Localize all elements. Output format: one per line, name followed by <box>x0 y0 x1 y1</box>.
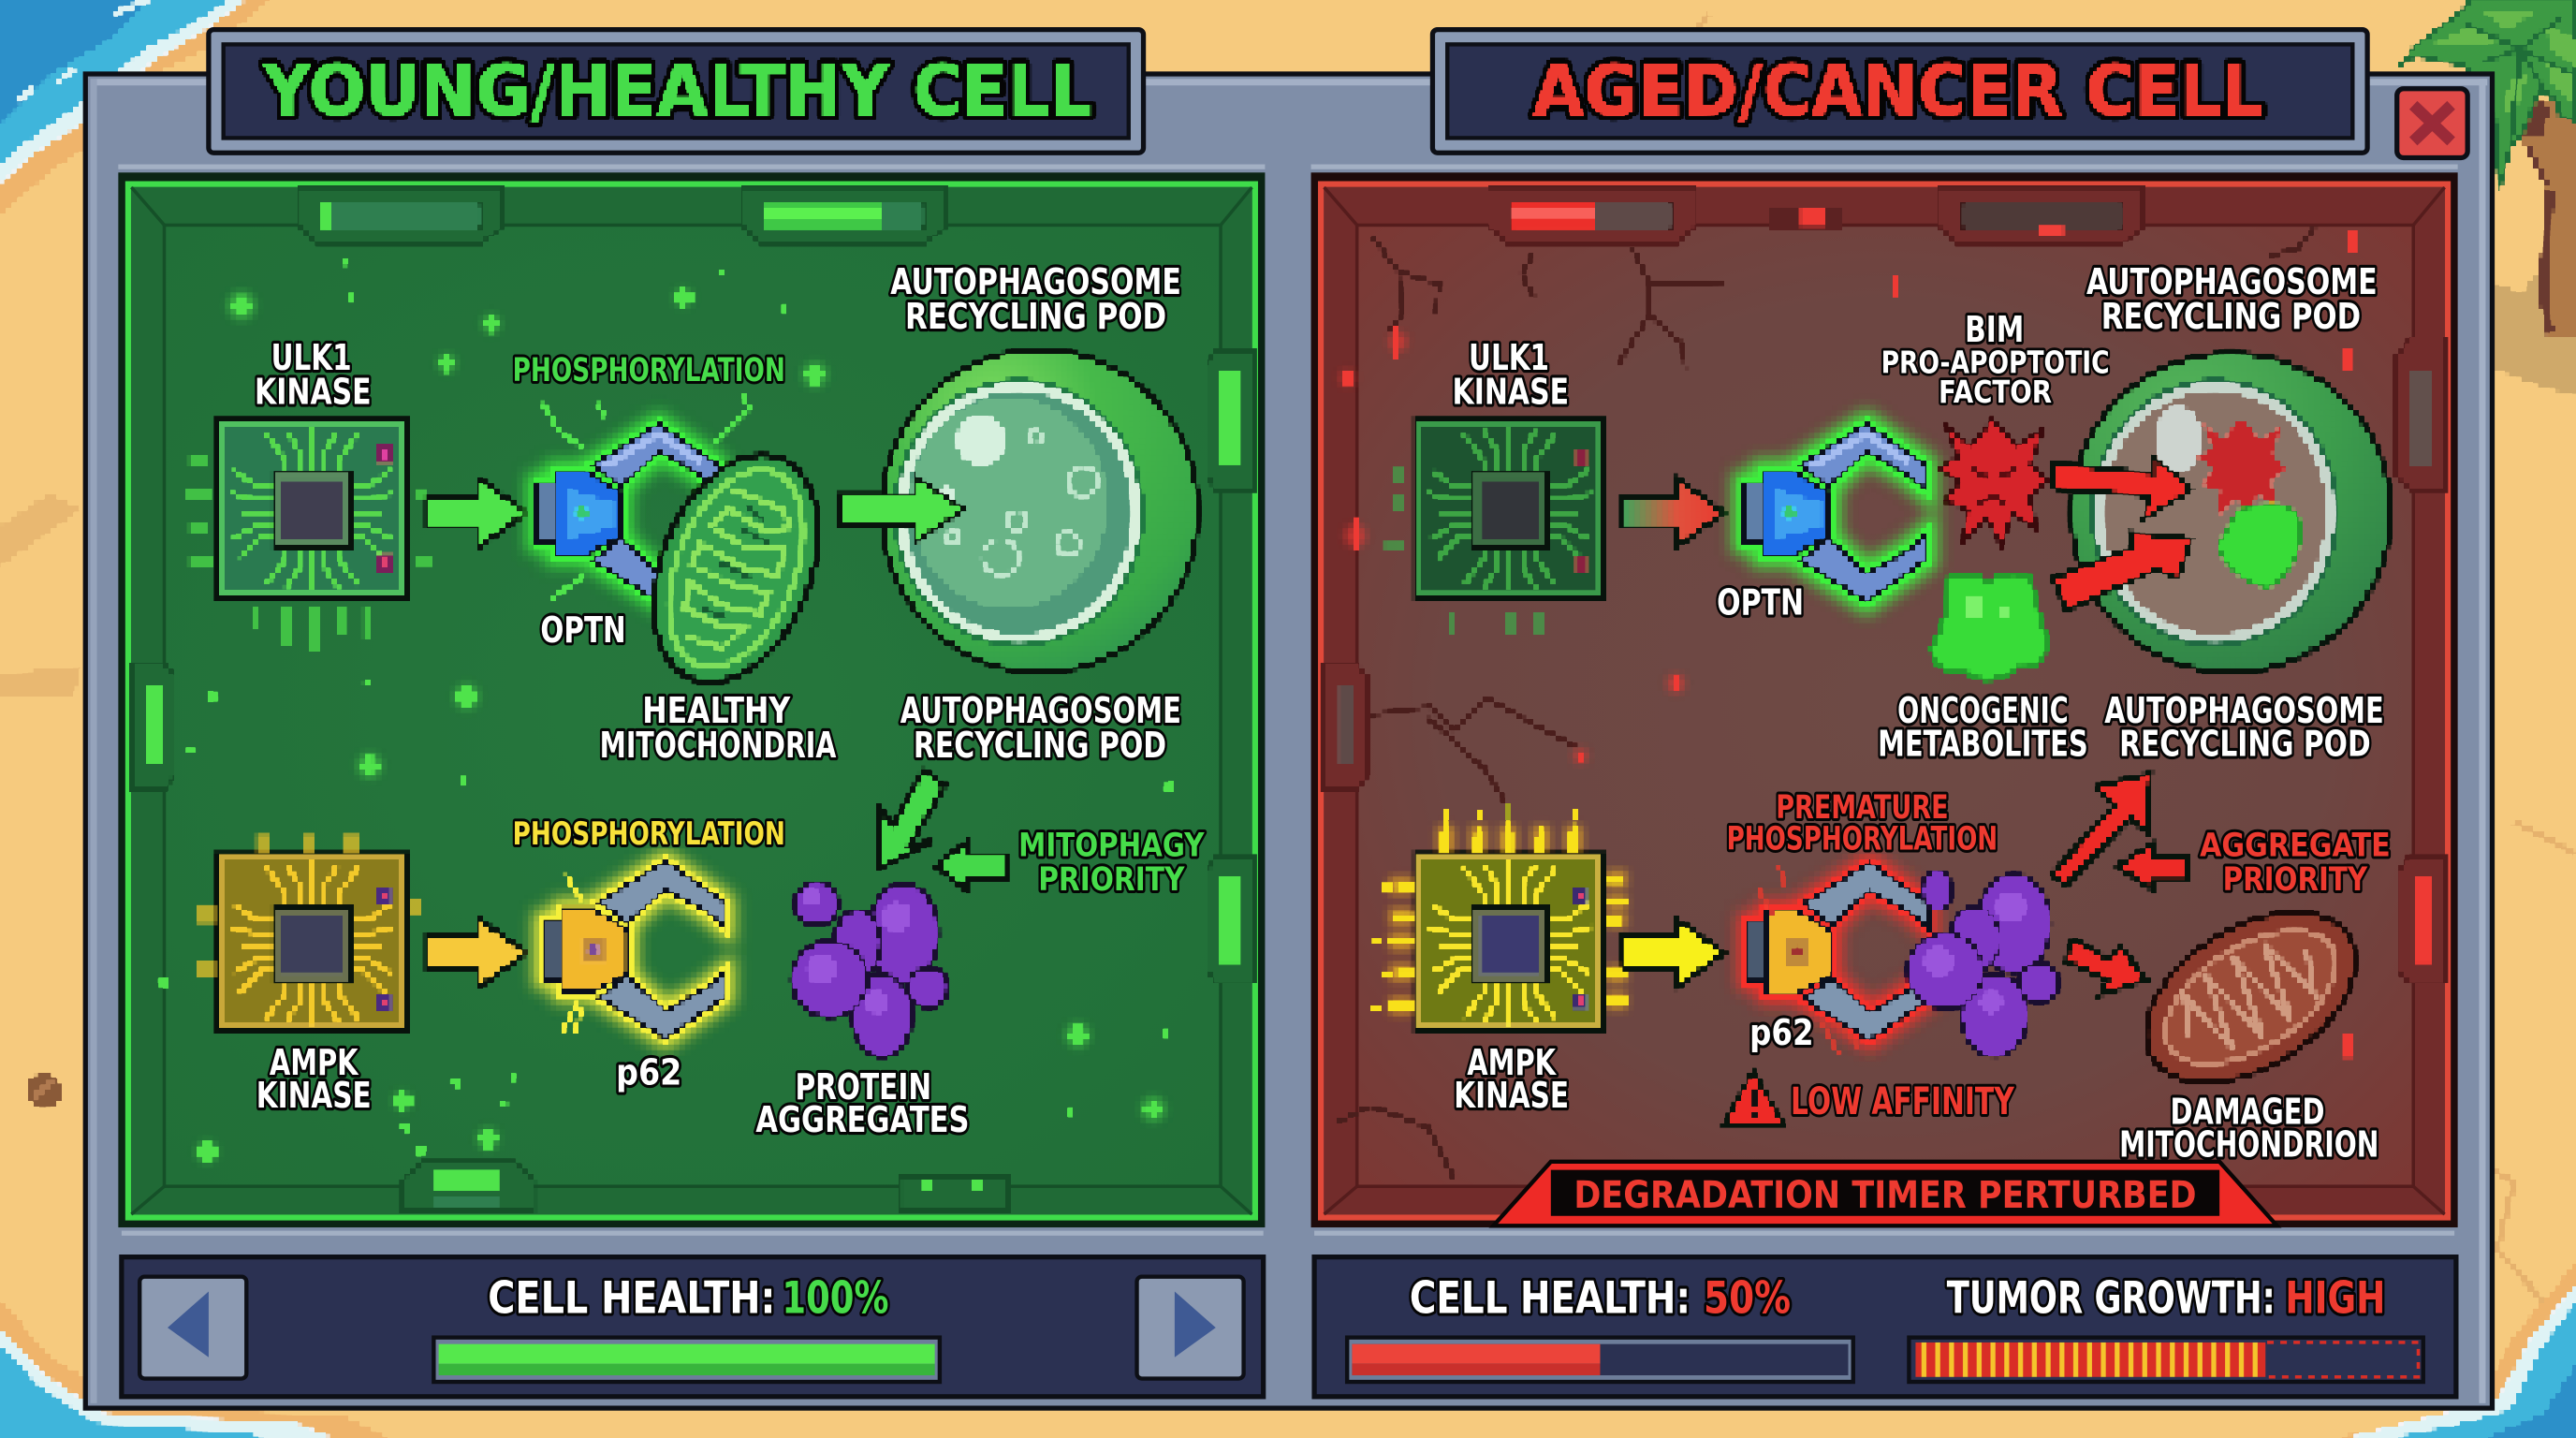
label: healthy mitochondria <box>600 690 836 767</box>
label: OPTN: OPTN <box>540 609 626 652</box>
label: autophagosome recycling pod top: RECYCLING POD <box>905 296 1166 338</box>
title plate: aged/cancer cell: AGED/CANCER CELL <box>1533 50 2264 132</box>
label: mitophagy priority <box>1018 826 1205 899</box>
icon: p62 claw <box>544 861 724 1038</box>
label: ULK1 kinase <box>255 337 372 414</box>
label: ULK1 kinase: ULK1 <box>1469 337 1549 379</box>
label: premature phosphorylation <box>1727 788 1998 858</box>
banner: degradation timer perturbed: DEGRADATION TIMER PERTURBED <box>1573 1173 2197 1217</box>
arrow: aggregate priority <box>2117 844 2187 889</box>
arrow: into pod <box>842 477 964 542</box>
label: ULK1 kinase: KINASE <box>255 372 372 414</box>
label: BIM pro-apoptotic factor: BIM <box>1965 309 2024 351</box>
readout: cell health 50%: 50% <box>1704 1272 1791 1324</box>
health bar: half red <box>1347 1338 1853 1382</box>
icon: ULK1 kinase chip <box>184 420 433 651</box>
red particles <box>1340 230 2356 1058</box>
label: premature phosphorylation: PHOSPHORYLATION <box>1727 819 1998 858</box>
label: mitophagy priority: MITOPHAGY <box>1018 826 1205 864</box>
icon: compromised autophagosome pod <box>2071 353 2391 672</box>
label: autophagosome recycling pod top: RECYCLING POD <box>2101 296 2361 338</box>
icon: autophagosome recycling pod <box>882 350 1197 672</box>
label: aggregate priority: PRIORITY <box>2223 860 2368 899</box>
status slots and damage on frame <box>1325 187 2445 983</box>
icon: protein aggregates jammed <box>1908 871 2058 1057</box>
button: previous <box>139 1277 246 1379</box>
label: autophagosome recycling pod lower <box>2104 690 2384 765</box>
label: phosphorylation green: PHOSPHORYLATION <box>513 351 785 389</box>
wall cracks <box>1338 227 2315 1181</box>
icon: p62 claw red glow <box>1748 862 1928 1053</box>
label: p62: p62 <box>1749 1012 1814 1054</box>
panel art: healthy cell machinery <box>131 187 1253 1211</box>
status bar: left <box>122 1257 1264 1397</box>
label: autophagosome recycling pod top <box>890 261 1181 338</box>
label: protein aggregates: PROTEIN <box>795 1066 931 1108</box>
readout: tumor growth high: HIGH <box>2285 1272 2385 1324</box>
label: oncogenic metabolites <box>1878 690 2088 765</box>
readout: cell health 50%: CELL HEALTH: <box>1410 1272 1690 1324</box>
icon: healthy mitochondria <box>623 432 849 706</box>
arrow: mitophagy priority <box>936 843 1005 889</box>
label: ULK1 kinase: KINASE <box>1453 372 1569 414</box>
label: BIM pro-apoptotic factor: FACTOR <box>1939 374 2052 410</box>
label: ULK1 kinase <box>1453 337 1569 414</box>
label: healthy mitochondria: MITOCHONDRIA <box>600 725 836 767</box>
icon: overactive AMPK kinase chip <box>1370 801 1630 1030</box>
close button <box>2397 89 2467 157</box>
label: protein aggregates <box>755 1066 970 1141</box>
pebble <box>26 1073 63 1109</box>
label: AMPK kinase <box>256 1042 372 1117</box>
label: damaged mitochondrion: MITOCHONDRION <box>2119 1124 2378 1167</box>
banner: degradation timer perturbed <box>1493 1162 2277 1225</box>
label: ULK1 kinase: ULK1 <box>271 337 352 379</box>
button: next <box>1137 1277 1244 1379</box>
icon: dim ULK1 kinase chip <box>1385 420 1603 634</box>
icon: OPTN claw <box>537 392 749 601</box>
arrow: aggregate to pod up <box>2052 774 2150 886</box>
label: premature phosphorylation: PREMATURE <box>1776 788 1949 827</box>
title plate: aged/cancer cell <box>1432 30 2367 153</box>
tumor growth bar: striped <box>1909 1338 2423 1382</box>
panel: aged/cancer cell <box>1311 172 2458 1227</box>
label: autophagosome recycling pod lower: AUTOPHAGOSOME <box>900 690 1181 732</box>
icon: AMPK kinase chip <box>198 835 420 1030</box>
panel art: aged cell machinery <box>1325 187 2445 1181</box>
label: oncogenic metabolites: METABOLITES <box>1878 723 2088 765</box>
icon: oncogenic metabolites <box>1932 574 2047 680</box>
label: autophagosome recycling pod top: AUTOPHAGOSOME <box>2086 261 2378 303</box>
arrow: to damaged mitochondrion <box>2067 940 2145 994</box>
status bar: right <box>1314 1257 2456 1397</box>
arrow: aggregates to pod <box>879 770 944 868</box>
readout: cell health 100%: CELL HEALTH: <box>488 1272 775 1324</box>
label: p62: p62 <box>616 1051 681 1093</box>
arrow: metabolites into pod <box>2054 533 2191 609</box>
label: BIM pro-apoptotic factor <box>1881 309 2110 410</box>
label: autophagosome recycling pod top: AUTOPHAGOSOME <box>890 261 1181 303</box>
title plate: young/healthy cell: YOUNG/HEALTHY CELL <box>262 50 1092 132</box>
label: autophagosome recycling pod lower: RECYCLING POD <box>914 725 1166 767</box>
label: AMPK kinase: KINASE <box>1454 1075 1569 1117</box>
label: mitophagy priority: PRIORITY <box>1038 860 1185 899</box>
arrow: ULK1 to OPTN <box>427 478 526 547</box>
label: autophagosome recycling pod lower: RECYCLING POD <box>2119 723 2371 765</box>
arrow: ULK1 to OPTN fading red <box>1623 478 1723 547</box>
label: AMPK kinase: AMPK <box>270 1042 359 1084</box>
icon: damaged mitochondrion <box>2116 878 2385 1117</box>
status slots on frame <box>131 187 1253 1211</box>
label: aggregate priority <box>2200 826 2391 899</box>
label: BIM pro-apoptotic factor: PRO-APOPTOTIC <box>1881 344 2110 380</box>
label: damaged mitochondrion <box>2119 1091 2378 1167</box>
label: AMPK kinase <box>1454 1042 1569 1117</box>
label: AMPK kinase: AMPK <box>1467 1042 1558 1084</box>
label: autophagosome recycling pod lower <box>900 690 1181 767</box>
health bar: full green <box>433 1338 940 1382</box>
label: low affinity: LOW AFFINITY <box>1791 1079 2014 1123</box>
label: protein aggregates: AGGREGATES <box>755 1099 970 1141</box>
label: phosphorylation yellow: PHOSPHORYLATION <box>513 815 785 853</box>
label: AMPK kinase: KINASE <box>256 1075 372 1117</box>
readout: tumor growth high: TUMOR GROWTH: <box>1947 1272 2276 1324</box>
panel: young/healthy cell <box>118 172 1265 1227</box>
arrow: AMPK to p62 bright <box>1623 918 1723 988</box>
icon: OPTN claw open <box>1745 424 1925 601</box>
label: oncogenic metabolites: ONCOGENIC <box>1897 690 2069 732</box>
label: damaged mitochondrion: DAMAGED <box>2170 1091 2324 1133</box>
label: autophagosome recycling pod top <box>2086 261 2378 338</box>
label: OPTN: OPTN <box>1717 581 1804 624</box>
icon: protein aggregates <box>792 882 948 1057</box>
arrow: AMPK to p62 <box>427 918 526 988</box>
title plate: young/healthy cell <box>209 30 1144 153</box>
arrow: BIM into pod <box>2052 455 2191 520</box>
icon: warning triangle <box>1725 1071 1782 1123</box>
readout: cell health 100%: 100% <box>782 1272 889 1324</box>
glowing green particles <box>159 259 1175 1162</box>
label: aggregate priority: AGGREGATE <box>2200 826 2391 864</box>
icon: BIM pro-apoptotic factor <box>1940 419 2047 546</box>
label: healthy mitochondria: HEALTHY <box>642 690 791 732</box>
label: autophagosome recycling pod lower: AUTOPHAGOSOME <box>2104 690 2384 732</box>
